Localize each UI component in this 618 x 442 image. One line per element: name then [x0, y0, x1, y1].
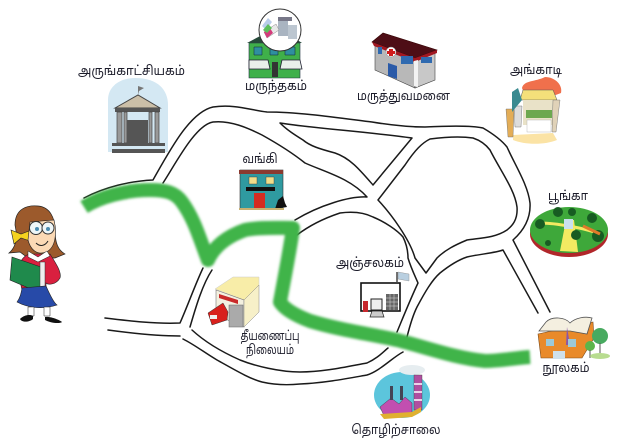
- face: [28, 220, 55, 253]
- icon: market: [506, 77, 561, 144]
- label: fire station: [240, 328, 300, 358]
- road network: [84, 106, 550, 385]
- label: bank: வங்கி: [242, 151, 278, 166]
- icon: bank: [239, 170, 287, 210]
- icon: pharmacy: [247, 9, 302, 78]
- bow: [11, 230, 30, 244]
- icon: factory: [374, 365, 430, 419]
- label line 2: நிலையம்: [246, 342, 294, 358]
- skirt: [17, 286, 57, 308]
- label: park: பூங்கா: [548, 188, 589, 204]
- glasses: [30, 222, 42, 234]
- icon: post office: [361, 272, 409, 317]
- label: factory: தொழிற்சாலை: [352, 422, 440, 438]
- green route: [84, 190, 530, 361]
- hair: [9, 206, 65, 258]
- icon: library: [538, 317, 610, 359]
- book: [10, 257, 44, 292]
- icon: fire station: [208, 277, 259, 327]
- legs: [28, 307, 50, 316]
- icon: museum: [108, 78, 168, 153]
- icon: hospital: [372, 33, 437, 88]
- icon: girl with book: [9, 206, 65, 323]
- icon: park: [530, 207, 608, 257]
- shoes: [20, 315, 62, 323]
- label: post office: அஞ்சலகம்: [336, 255, 404, 271]
- label: library: நூலகம்: [542, 360, 590, 376]
- label: hospital: மருத்துவமனை: [357, 88, 450, 104]
- label: pharmacy: மருந்தகம்: [245, 78, 307, 94]
- sweater: [18, 254, 60, 294]
- label: fire station: தீயணைப்பு: [240, 328, 300, 344]
- label: museum: அருங்காட்சியகம்: [78, 63, 185, 79]
- collar: [28, 251, 50, 262]
- label: market: அங்காடி: [510, 62, 563, 78]
